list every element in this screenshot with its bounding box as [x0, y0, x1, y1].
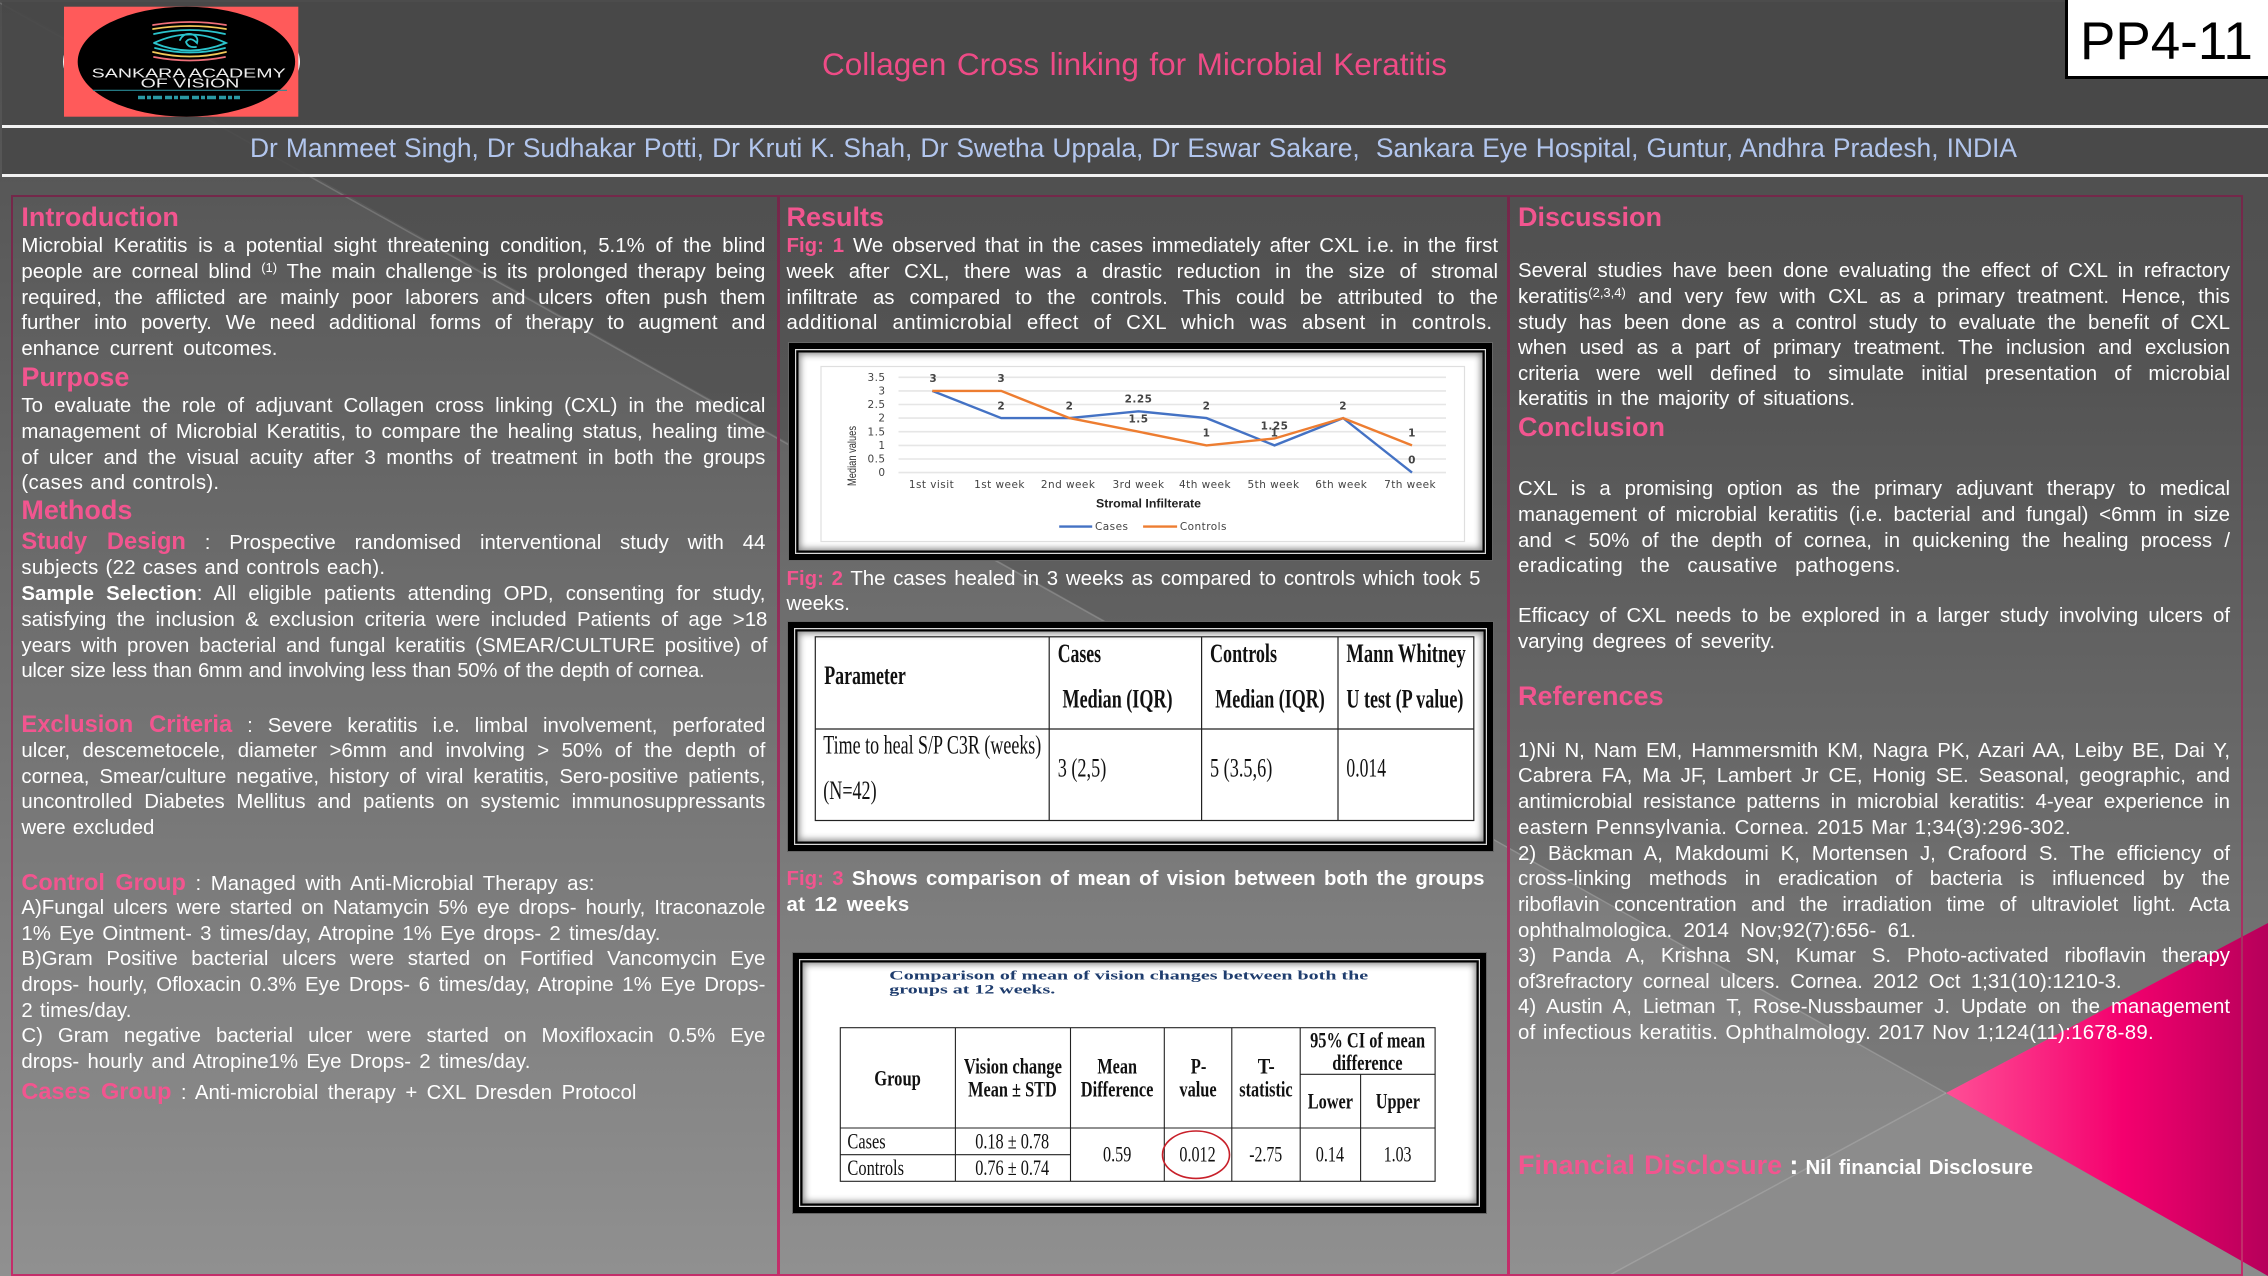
figure 1: line chart of stromal infiltrate: 0	[878, 467, 885, 479]
section: discussion: Discussion	[1518, 202, 1662, 232]
figure 2 caption: Fig: 2 The cases healed in 3 weeks as compared to controls which took 5	[786, 568, 1480, 590]
section: conclusion: Conclusion	[1518, 412, 1665, 442]
section: discussion: keratitis in the majority of situations.	[1518, 388, 1855, 410]
control group: 2 times/day.	[21, 1000, 131, 1022]
section: financial disclosure: Financial Disclosure : Nil financial Disclosure	[1518, 1150, 2033, 1180]
title: Collagen Cross linking for Microbial Keratitis	[822, 46, 1447, 82]
sample selection: years with proven bacterial and fungal keratitis (SMEAR/CULTURE positive) of	[21, 635, 767, 657]
logo: Sankara Academy of Vision: SANKARA ACADEMY	[92, 66, 287, 80]
section: references: antimicrobial resistance patterns in microbial keratitis: 4-year experience in	[1518, 791, 2230, 813]
section: introduction: Microbial Keratitis is a potential sight threatening condition, 5.1% of the blind	[21, 235, 765, 257]
section: references: Cabrera FA, Ma JF, Lambert Jr CE, Honig SE. Seasonal, geographic, and	[1518, 765, 2230, 787]
exclusion criteria: Exclusion Criteria : Severe keratitis i.e. limbal involvement, perforated	[21, 712, 765, 738]
section: references: riboflavin concentration and the irradiation time of ultraviolet light. Acta	[1518, 894, 2230, 916]
section: references: 3) Panda A, Krishna SN, Kumar S. Photo-activated riboflavin therapy	[1518, 945, 2230, 967]
figure 1: line chart of stromal infiltrate: Median values	[844, 426, 858, 486]
figure 2: healing time table: 0.014	[1346, 754, 1386, 783]
figure 3: vision comparison table: statistic	[1239, 1077, 1293, 1102]
figure 3: vision comparison table: Cases	[847, 1128, 886, 1153]
section: introduction: required, the afflicted are mainly poor laborers and ulcers often push them	[21, 287, 765, 309]
figure 3: vision comparison table: Mean ± STD	[968, 1077, 1057, 1102]
section: conclusion: CXL is a promising option as the primary adjuvant therapy to medical	[1518, 478, 2230, 500]
section: results and figure 1 text: Results	[786, 202, 884, 232]
figure 1: line chart of stromal infiltrate: 3rd week	[1112, 479, 1164, 491]
figure 2: healing time table	[787, 621, 1494, 852]
figure 1: line chart of stromal infiltrate: 1	[878, 440, 885, 452]
figure 1: line chart of stromal infiltrate: 1.5	[867, 426, 885, 438]
section: purpose: To evaluate the role of adjuvant Collagen cross linking (CXL) in the medical	[21, 395, 765, 417]
section: results and figure 1 text: Fig: 1 We observed that in the cases immediately after CXL i.e. in the first	[786, 235, 1498, 257]
section: discussion: Several studies have been done evaluating the effect of CXL in refractory	[1518, 260, 2230, 282]
section: references: 4) Austin A, Lietman T, Rose-Nussbaumer J. Update on the management	[1518, 996, 2230, 1018]
exclusion criteria: ulcer, descemetocele, diameter >6mm and involving > 50% of the depth of	[21, 740, 765, 762]
figure 2: healing time table: 3 (2,5)	[1058, 754, 1106, 783]
figure 1: line chart of stromal infiltrate: 1.5	[1128, 414, 1148, 426]
figure 2: healing time table: Parameter	[824, 661, 906, 690]
figure 1: line chart of stromal infiltrate: 1	[1408, 428, 1415, 440]
figure 1: line chart of stromal infiltrate: Stromal Infilterate	[1096, 496, 1201, 510]
figure 2: healing time table: 5 (3.5,6)	[1210, 754, 1272, 783]
figure 2: healing time table: Time to heal S/P C3R (weeks)	[823, 730, 1041, 759]
section: introduction	[21, 202, 765, 360]
section: references: 1)Ni N, Nam EM, Hammersmith KM, Nagra PK, Azari AA, Leiby BE, Dai Y,	[1518, 740, 2230, 762]
section: references: 2) Bäckman A, Makdoumi K, Mortensen J, Crafoord S. The efficiency of	[1518, 843, 2230, 865]
figure 3: vision comparison table: Lower	[1308, 1088, 1353, 1113]
figure 3: vision comparison table: 0.59	[1103, 1142, 1131, 1167]
figure 1: line chart of stromal infiltrate: 4th week	[1179, 479, 1231, 491]
section: conclusion	[1518, 412, 2230, 653]
control group: drops- hourly and Atropine1% Eye Drops- 2 times/day.	[21, 1051, 530, 1073]
panel: right column	[1508, 195, 2243, 1276]
figure 3: vision comparison table: 0.012	[1179, 1142, 1216, 1167]
exclusion criteria: were excluded	[21, 817, 154, 839]
control group: Control Group : Managed with Anti-Microbial Therapy as:	[21, 869, 594, 895]
figure 3 caption: at 12 weeks	[786, 894, 910, 916]
panel: left column	[11, 195, 779, 1276]
figure 3: vision comparison table: Comparison of mean of vision changes between both the	[889, 968, 1369, 982]
section: introduction: further into poverty. We need additional forms of therapy to augment and	[21, 312, 765, 334]
figure 3: vision comparison table: Difference	[1081, 1077, 1154, 1102]
authors and affiliation: Dr Manmeet Singh, Dr Sudhakar Potti, Dr Kruti K. Shah, Dr Swetha Uppala, Dr Eswar Sakare, Sankara Eye Hospital, Guntur, Andhra Pradesh, INDIA	[250, 133, 2017, 163]
section: purpose: management of Microbial Keratitis, to compare the healing status, healing time	[21, 421, 765, 443]
figure 3 caption: Fig: 3 Shows comparison of mean of vision between both the groups	[786, 868, 1484, 890]
figure 3: vision comparison table: groups at 12 weeks.	[889, 983, 1055, 997]
figure 1: line chart of stromal infiltrate: Cases	[1094, 521, 1128, 533]
figure 1: line chart of stromal infiltrate: 1st week	[974, 479, 1025, 491]
figure 1: line chart of stromal infiltrate: 2	[1202, 400, 1210, 412]
exclusion criteria: uncontrolled Diabetes Mellitus and patients on systemic immunosuppressants	[21, 791, 765, 813]
figure 1: line chart of stromal infiltrate: 2	[878, 413, 885, 425]
poster code box PP4-11: PP4-11	[2080, 12, 2253, 71]
cases group: Cases Group : Anti-microbial therapy + CXL Dresden Protocol	[21, 1078, 636, 1104]
figure 1: line chart of stromal infiltrate: 3	[878, 386, 885, 398]
figure 1: line chart of stromal infiltrate: 2	[1065, 400, 1073, 412]
section: introduction: people are corneal blind (1) The main challenge is its prolonged therapy being	[21, 260, 765, 283]
figure 1: line chart of stromal infiltrate	[788, 342, 1492, 561]
section: references: cross-linking methods in eradication of bacteria is influenced by the	[1518, 868, 2230, 890]
figure 1: line chart of stromal infiltrate: 6th week	[1315, 479, 1367, 491]
figure 3: vision comparison table: T-	[1258, 1053, 1275, 1078]
exclusion criteria: cornea, Smear/culture negative, history of viral keratitis, Sero-positive patients,	[21, 766, 765, 788]
section: purpose: (cases and controls).	[21, 472, 219, 494]
figure 1: line chart of stromal infiltrate: 1	[1202, 428, 1210, 440]
section: introduction: enhance current outcomes.	[21, 338, 277, 360]
section: purpose: of ulcer and the visual acuity after 3 months of treatment in both the groups	[21, 447, 765, 469]
figure 3: vision comparison table: Controls	[847, 1155, 904, 1180]
figure 3: vision comparison table: -2.75	[1249, 1142, 1282, 1167]
section: references: ophthalmologica. 2014 Nov;92(7):656- 61.	[1518, 920, 1916, 942]
section: conclusion: eradicating the causative pathogens.	[1518, 555, 1901, 577]
section: purpose	[21, 362, 765, 494]
figure 1: line chart of stromal infiltrate: 2	[997, 400, 1005, 412]
control group: drops- hourly, Ofloxacin 0.3% Eye Drops- 6 times/day, Atropine 1% Eye Drops-	[21, 974, 765, 996]
panel: middle column	[778, 195, 1509, 1276]
figure 1: line chart of stromal infiltrate: 2nd week	[1040, 479, 1095, 491]
sample selection: satisfying the inclusion & exclusion criteria were included Patients of age >18	[21, 609, 767, 631]
section: discussion: keratitis(2,3,4) and very few with CXL as a primary treatment. Hence, this	[1518, 285, 2230, 308]
section: discussion: when used as a part of primary treatment. The inclusion and exclusion	[1518, 337, 2230, 359]
figure 3: vision comparison table: value	[1179, 1077, 1217, 1102]
figure 3: vision comparison table: 0.76 ± 0.74	[975, 1155, 1049, 1180]
sample selection	[21, 583, 768, 682]
figure 1: line chart of stromal infiltrate: 2	[1339, 400, 1346, 412]
figure 3: vision comparison table: difference	[1332, 1050, 1403, 1075]
header band	[2, 2, 2268, 125]
figure 3: vision comparison table: Group	[874, 1066, 921, 1091]
figure 1: line chart of stromal infiltrate: 5th week	[1247, 479, 1299, 491]
section: references: References	[1518, 681, 1664, 711]
control group: A)Fungal ulcers were started on Natamycin 5% eye drops- hourly, Itraconazole	[21, 897, 765, 919]
figure 1: line chart of stromal infiltrate: 7th week	[1384, 479, 1436, 491]
figure 1: line chart of stromal infiltrate: 0	[1408, 454, 1415, 466]
section: discussion: study has been done as a control study to evaluate the benefit of CXL	[1518, 312, 2230, 334]
section: references: eastern Pennsylvania. Cornea. 2015 Mar 1;34(3):296-302.	[1518, 817, 2071, 839]
section: methods: Methods	[21, 495, 132, 525]
figure 3: vision comparison table: Mean	[1097, 1053, 1137, 1078]
figure 1: line chart of stromal infiltrate: Controls	[1179, 521, 1226, 533]
section: purpose: Purpose	[21, 362, 129, 392]
control group: C) Gram negative bacterial ulcer were started on Moxifloxacin 0.5% Eye	[21, 1025, 765, 1047]
figure 1: line chart of stromal infiltrate: 1	[1270, 428, 1278, 440]
section: introduction: Introduction	[21, 202, 179, 232]
section: results and figure 1 text: infiltrate as compared to the controls. This could be attributed to the	[786, 287, 1498, 309]
figure 2: healing time table: Median (IQR)	[1215, 684, 1325, 713]
control group: 1% Eye Ointment- 3 times/day, Atropine 1% Eye drops- 2 times/day.	[21, 923, 660, 945]
figure 1: line chart of stromal infiltrate: 1.25	[1260, 421, 1288, 433]
figure 3: vision comparison table: P-	[1191, 1053, 1206, 1078]
section: conclusion: management of microbial keratitis (i.e. bacterial and fungal) <6mm in size	[1518, 504, 2230, 526]
section: methods	[21, 495, 768, 1104]
section: conclusion: and < 50% of the depth of cornea, in quickening the healing process /	[1518, 530, 2230, 552]
section: results and figure 1 text: additional antimicrobial effect of CXL which was absent in controls.	[786, 312, 1492, 334]
figure 1: line chart of stromal infiltrate: 0.5	[867, 454, 885, 466]
section: conclusion: varying degrees of severity.	[1518, 631, 1775, 653]
figure 1: line chart of stromal infiltrate: 2.5	[867, 399, 885, 411]
figure 2 caption: weeks.	[786, 593, 850, 615]
figure 3: vision comparison table: 0.18 ± 0.78	[975, 1128, 1049, 1153]
poster code box PP4-11	[2065, 0, 2268, 79]
figure 2: healing time table: Cases	[1058, 639, 1101, 668]
figure 3: vision comparison table	[792, 952, 1487, 1214]
figure 2 caption	[786, 568, 1480, 615]
study design	[21, 529, 765, 579]
section: references: of infectious keratitis. Ophthalmology. 2017 Nov 1;124(11):1678-89.	[1518, 1022, 2154, 1044]
section: references: of3refractory corneal ulcers. Cornea. 2012 Oct 1;31(10):1210-3.	[1518, 971, 2122, 993]
figure 3: vision comparison table: Vision change	[964, 1053, 1062, 1078]
figure 3 caption	[786, 868, 1484, 916]
figure 2: healing time table: Controls	[1210, 639, 1277, 668]
figure 3: vision comparison table: Upper	[1376, 1088, 1420, 1113]
control group	[21, 869, 765, 1073]
figure 2: healing time table: (N=42)	[823, 776, 877, 805]
logo: Sankara Academy of Vision	[63, 6, 300, 117]
figure 1: line chart of stromal infiltrate: 3	[997, 373, 1005, 385]
section: discussion: criteria were well defined to simulate initial presentation of microbial	[1518, 363, 2230, 385]
sample selection: Sample Selection: All eligible patients attending OPD, consenting for study,	[21, 583, 765, 605]
study design: Study Design : Prospective randomised interventional study with 44	[21, 529, 765, 555]
study design: subjects (22 cases and controls each).	[21, 557, 385, 579]
figure 1: line chart of stromal infiltrate: 2.25	[1124, 394, 1152, 406]
figure 1: line chart of stromal infiltrate: 3.5	[867, 372, 885, 384]
control group: B)Gram Positive bacterial ulcers were started on Fortified Vancomycin Eye	[21, 948, 765, 970]
section: references	[1518, 681, 2230, 1044]
exclusion criteria	[21, 712, 766, 839]
figure 3: vision comparison table: 1.03	[1384, 1142, 1412, 1167]
section: conclusion: Efficacy of CXL needs to be explored in a larger study involving ulcers of	[1518, 605, 2230, 627]
logo: Sankara Academy of Vision: OF VISION	[141, 76, 239, 90]
figure 3: vision comparison table: 0.14	[1316, 1142, 1344, 1167]
section: results and figure 1 text: week after CXL, there was a drastic reduction in the size of stromal	[786, 261, 1498, 283]
authors band	[2, 125, 2268, 177]
section: discussion	[1518, 202, 2230, 410]
sample selection: ulcer size less than 6mm and involving less than 50% of the depth of cornea.	[21, 660, 704, 682]
figure 3: vision comparison table: 95% CI of mean	[1310, 1028, 1425, 1053]
section: results and figure 1 text	[786, 202, 1498, 334]
figure 1: line chart of stromal infiltrate: 1st visit	[908, 479, 954, 491]
figure 2: healing time table: Median (IQR)	[1062, 684, 1172, 713]
figure 1: line chart of stromal infiltrate: 3	[929, 373, 937, 385]
